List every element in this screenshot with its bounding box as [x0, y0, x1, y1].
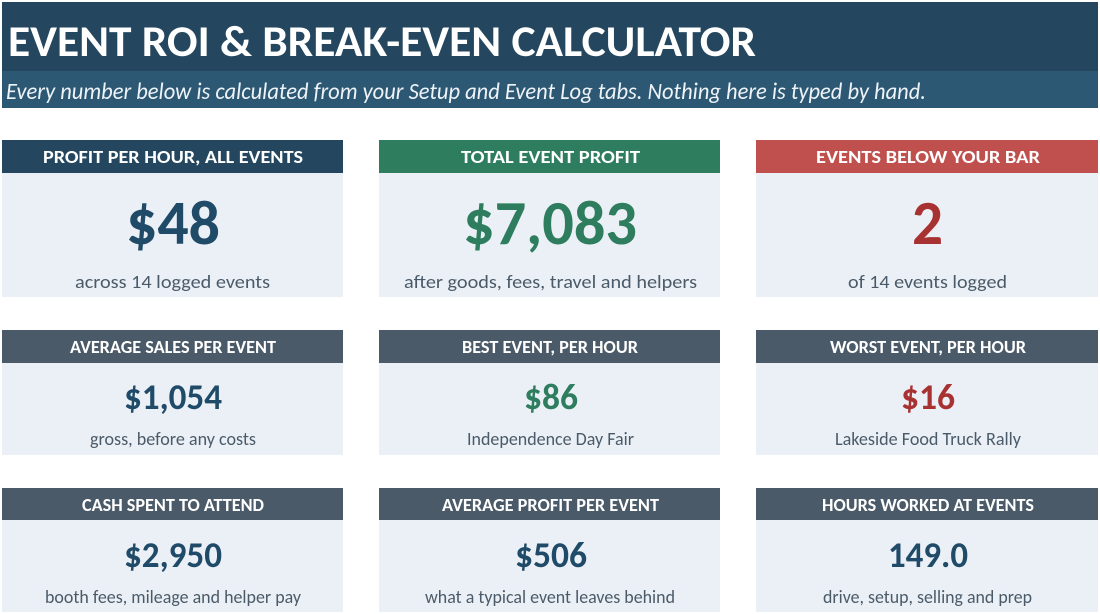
value: $506 [515, 532, 587, 577]
subtitle banner [2, 71, 1098, 108]
title banner [2, 2, 1098, 71]
value: $16 [901, 374, 955, 419]
value: $86 [524, 374, 578, 419]
value: $7,083 [463, 184, 637, 261]
value: 149.0 [888, 532, 968, 577]
note: Independence Day Fair [467, 427, 635, 450]
value: $2,950 [124, 532, 222, 577]
note: after goods, fees, travel and helpers [404, 270, 697, 293]
subtitle: Every number below is calculated from your Setup and Event Log tabs. Nothing here is typed by hand. [6, 77, 926, 106]
note: what a typical event leaves behind [425, 585, 675, 608]
heading: AVERAGE PROFIT PER EVENT [442, 494, 659, 516]
note: Lakeside Food Truck Rally [835, 427, 1022, 450]
note: of 14 events logged [848, 270, 1007, 293]
panel: profit per hour [2, 140, 343, 297]
heading: CASH SPENT TO ATTEND [82, 494, 264, 516]
panel: cash spent to attend [2, 488, 343, 612]
note: gross, before any costs [90, 427, 256, 450]
heading: BEST EVENT, PER HOUR [462, 336, 638, 358]
heading: WORST EVENT, PER HOUR [830, 336, 1026, 358]
heading: PROFIT PER HOUR, ALL EVENTS [43, 146, 303, 168]
note: drive, setup, selling and prep [823, 585, 1032, 608]
heading: HOURS WORKED AT EVENTS [822, 494, 1034, 516]
note: booth fees, mileage and helper pay [45, 585, 302, 608]
panel: average sales per event [2, 330, 343, 455]
panel: total event profit [379, 140, 720, 297]
panel: average profit per event [379, 488, 720, 612]
note: across 14 logged events [75, 270, 270, 293]
panel: events below your bar [756, 140, 1098, 297]
value: $1,054 [124, 374, 222, 419]
panel: best event per hour [379, 330, 720, 455]
value: 2 [912, 184, 943, 261]
panel: worst event per hour [756, 330, 1098, 455]
panel: hours worked at events [756, 488, 1098, 612]
value: $48 [126, 184, 220, 261]
heading: AVERAGE SALES PER EVENT [70, 336, 276, 358]
heading: EVENTS BELOW YOUR BAR [816, 146, 1040, 168]
title: EVENT ROI & BREAK-EVEN CALCULATOR [8, 14, 756, 68]
heading: TOTAL EVENT PROFIT [461, 146, 640, 168]
